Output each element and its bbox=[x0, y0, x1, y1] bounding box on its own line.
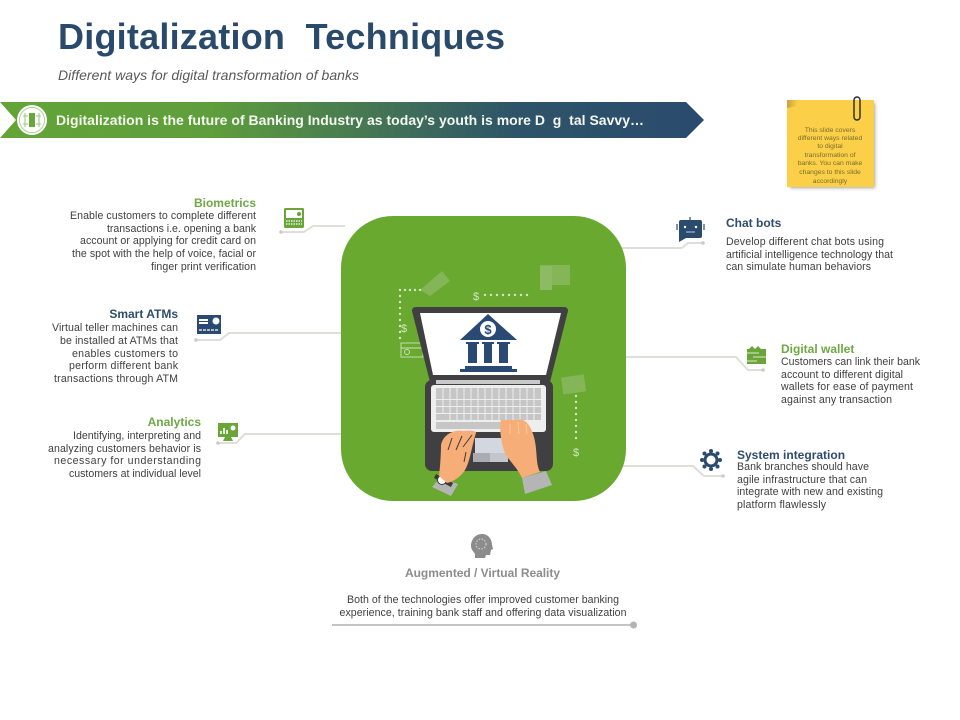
item: Smart ATMs: Smart ATMs bbox=[109, 307, 178, 321]
item: Analytics: analyzing customers behavior is bbox=[48, 443, 201, 455]
item: System integration bbox=[737, 448, 883, 511]
item: Augmented / Virtual Reality bbox=[332, 566, 637, 628]
icon: chip badge bbox=[17, 105, 47, 135]
icon: chat bot bbox=[677, 217, 704, 242]
item: Biometrics bbox=[70, 196, 257, 273]
item: Smart ATMs: Virtual teller machines can bbox=[52, 322, 178, 334]
item: Chat bots bbox=[726, 216, 893, 273]
bank icon: $ bbox=[484, 322, 492, 337]
item: Smart ATMs: be installed at ATMs that bbox=[60, 335, 178, 347]
item: Biometrics: Biometrics bbox=[194, 196, 256, 210]
sticky note text: to digital bbox=[817, 143, 843, 150]
item: System integration: System integration bbox=[737, 448, 845, 462]
item: Analytics: Identifying, interpreting and bbox=[73, 430, 201, 442]
item: Smart ATMs: transactions through ATM bbox=[54, 373, 178, 385]
faint money and device icons: $ bbox=[473, 291, 479, 303]
item: Biometrics: transactions i.e. opening a bank bbox=[107, 223, 257, 235]
item: Augmented / Virtual Reality: Augmented / Virtual Reality bbox=[405, 566, 560, 580]
item: Digital wallet: Customers can link their bank bbox=[781, 356, 921, 368]
bank icon bbox=[460, 314, 517, 372]
item: Augmented / Virtual Reality: experience, training bank staff and offering data visualization bbox=[340, 607, 627, 619]
icon: system integration gear bbox=[700, 449, 722, 471]
item: Biometrics: account or applying for credit card on bbox=[80, 235, 256, 247]
left hand bbox=[432, 431, 476, 496]
item: Augmented / Virtual Reality: Both of the technologies offer improved customer banking bbox=[347, 594, 619, 606]
item: Biometrics: Enable customers to complete different bbox=[70, 210, 256, 222]
item: System integration: agile infrastructure that can bbox=[737, 474, 867, 486]
faint money and device icons bbox=[399, 265, 586, 459]
sticky note text bbox=[798, 127, 863, 185]
trackpad bbox=[473, 438, 508, 462]
item: Chat bots: can simulate human behaviors bbox=[726, 261, 871, 273]
icon: AR VR head bbox=[471, 534, 493, 558]
keyboard bbox=[431, 385, 546, 432]
item: Digital wallet: account to different digital bbox=[781, 369, 903, 381]
item: Biometrics: finger print verification bbox=[151, 261, 256, 273]
item: Chat bots: Develop different chat bots using bbox=[726, 236, 884, 248]
sticky note text: accordingly bbox=[813, 178, 848, 185]
item: System integration: Bank branches should have bbox=[737, 461, 869, 473]
sticky note text: transformation of bbox=[804, 152, 856, 159]
sticky note text: different ways related bbox=[798, 135, 862, 142]
icon: ATM card bbox=[197, 315, 221, 334]
item: Smart ATMs: enables customers to bbox=[72, 348, 178, 360]
item: Biometrics: the spot with the help of voice, facial or bbox=[72, 248, 256, 260]
sticky note text: changes to this slide bbox=[799, 169, 861, 176]
right hand bbox=[500, 420, 552, 494]
central green panel bbox=[341, 216, 626, 501]
item: System integration: platform flawlessly bbox=[737, 499, 827, 511]
icon: paper clip bbox=[854, 97, 860, 120]
item: Analytics bbox=[48, 415, 201, 480]
faint money and device icons: $ bbox=[401, 323, 407, 335]
icon: analytics monitor bbox=[218, 423, 238, 441]
sticky note bbox=[787, 97, 875, 188]
faint money and device icons: $ bbox=[573, 447, 579, 459]
sticky note text: This slide covers bbox=[805, 127, 856, 134]
item: Analytics: necessary for understanding bbox=[54, 455, 201, 467]
subtitle: Different ways for digital transformation of banks bbox=[58, 67, 359, 83]
item: Analytics: Analytics bbox=[148, 415, 201, 429]
item: Digital wallet: against any transaction bbox=[781, 394, 892, 406]
item: Smart ATMs: perform different bank bbox=[69, 360, 179, 372]
item: Digital wallet bbox=[780, 342, 921, 406]
item: Analytics: customers at individual level bbox=[69, 468, 201, 480]
item: Chat bots: artificial intelligence technology that bbox=[726, 249, 893, 261]
item: Digital wallet: Digital wallet bbox=[781, 342, 854, 356]
item: System integration: integrate with new and existing bbox=[737, 486, 883, 498]
banner arrow bbox=[0, 102, 704, 138]
laptop bbox=[412, 307, 568, 471]
item: Smart ATMs bbox=[52, 307, 179, 385]
banner text: Digitalization is the future of Banking Industry as today’s youth is more D g tal Savvy… bbox=[56, 112, 644, 128]
icon: digital wallet bbox=[747, 346, 766, 364]
title: Digitalization Techniques bbox=[58, 16, 505, 57]
item: Digital wallet: wallets for ease of payment bbox=[780, 381, 913, 393]
sticky note text: banks. You can make bbox=[798, 160, 863, 167]
icon: biometric device bbox=[284, 208, 304, 228]
connector lines bbox=[194, 226, 765, 478]
item: Chat bots: Chat bots bbox=[726, 216, 782, 230]
